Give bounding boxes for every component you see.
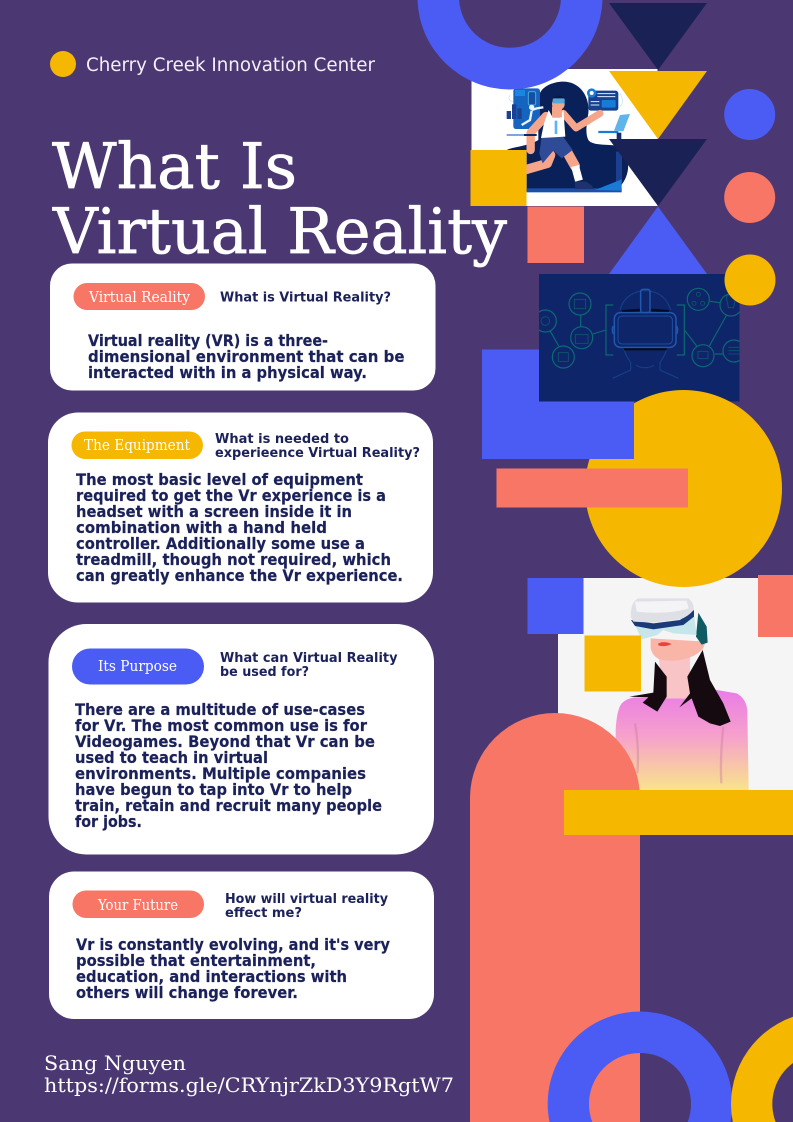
body text: dimensional environment that can be	[88, 347, 405, 366]
coral bar	[496, 468, 688, 508]
yellow ring bottom	[731, 1017, 793, 1122]
question: be used for?	[220, 664, 309, 680]
yellow bar	[564, 790, 793, 835]
image: runner on VR treadmill	[472, 69, 658, 206]
question: experieence Virtual Reality?	[215, 445, 420, 461]
pill: your future	[72, 890, 204, 918]
body text: treadmill, though not required, which	[76, 550, 391, 569]
body text: required to get the Vr experience is a	[76, 486, 386, 505]
body text: headset with a screen inside it in	[76, 502, 352, 521]
body text: for Vr. The most common use is for	[75, 716, 367, 735]
body text: Videogames. Beyond that Vr can be	[75, 732, 375, 751]
image: VR headset network diagram	[534, 274, 745, 402]
footer: author and link	[44, 1052, 454, 1097]
blue square	[482, 350, 634, 459]
panel: your future	[49, 872, 434, 1019]
blue triangle	[609, 206, 707, 274]
panel: what is virtual reality	[50, 264, 436, 390]
body text: There are a multitude of use-cases	[75, 700, 365, 719]
body text: have begun to tap into Vr to help	[75, 780, 352, 799]
pill: its purpose	[72, 648, 204, 684]
body text: used to teach in virtual	[75, 748, 268, 767]
body text: Virtual reality (VR) is a three-	[88, 331, 328, 350]
footer: author and link: https://forms.gle/CRYnjrZkD3Y9RgtW7	[44, 1074, 454, 1097]
title: What Is	[52, 130, 297, 203]
yellow circle	[724, 254, 776, 306]
pill: the equipment	[72, 432, 203, 459]
coral square right	[758, 575, 793, 637]
body text: environments. Multiple companies	[75, 764, 366, 783]
question: What is needed to	[215, 431, 349, 447]
navy triangle middle	[609, 139, 707, 206]
body text: others will change forever.	[76, 983, 298, 1002]
title	[52, 130, 507, 268]
body text	[76, 935, 391, 1002]
body text: train, retain and recruit many people	[75, 796, 382, 815]
body text: interacted with in a physical way.	[88, 363, 367, 382]
pill: your future: Your Future	[97, 896, 178, 914]
question	[215, 431, 420, 461]
coral circle	[724, 172, 775, 223]
question	[225, 891, 388, 921]
pill: its purpose: Its Purpose	[98, 657, 177, 675]
title: Virtual Reality	[52, 195, 507, 268]
body text	[76, 470, 403, 585]
body text: possible that entertainment,	[76, 951, 316, 970]
body text: education, and interactions with	[76, 967, 347, 986]
pill: virtual reality: Virtual Reality	[88, 288, 190, 306]
image: woman wearing VR headset	[558, 578, 793, 792]
big yellow circle	[585, 390, 782, 587]
question: effect me?	[225, 905, 302, 921]
body text: controller. Additionally some use a	[76, 534, 365, 553]
question: How will virtual reality	[225, 891, 388, 907]
body text	[75, 700, 382, 831]
question: What can Virtual Reality	[220, 650, 398, 666]
panel: its purpose	[48, 624, 434, 854]
coral arch	[470, 713, 640, 1122]
small blue square	[528, 578, 584, 634]
footer: author and link: Sang Nguyen	[44, 1052, 186, 1075]
question: What is Virtual Reality?	[220, 290, 391, 306]
small yellow square	[584, 636, 641, 692]
panel: the equipment	[48, 412, 433, 602]
body text	[88, 331, 405, 382]
pill: virtual reality	[74, 283, 205, 310]
body text: Vr is constantly evolving, and it's very	[76, 935, 391, 954]
question	[220, 650, 398, 680]
body text: for jobs.	[75, 812, 142, 831]
body text: combination with a hand held	[76, 518, 327, 537]
pill: the equipment: The Equipment	[84, 436, 190, 454]
yellow triangle	[609, 71, 707, 139]
navy triangle top	[609, 3, 707, 70]
blue ring bottom	[548, 1012, 732, 1122]
header: organisation name: Cherry Creek Innovation Center	[86, 55, 375, 76]
body text: The most basic level of equipment	[76, 470, 363, 489]
coral square	[528, 206, 584, 263]
blue circle	[724, 89, 775, 140]
body text: can greatly enhance the Vr experience.	[76, 566, 403, 585]
yellow square	[470, 150, 526, 206]
blue ring top	[418, 0, 602, 89]
